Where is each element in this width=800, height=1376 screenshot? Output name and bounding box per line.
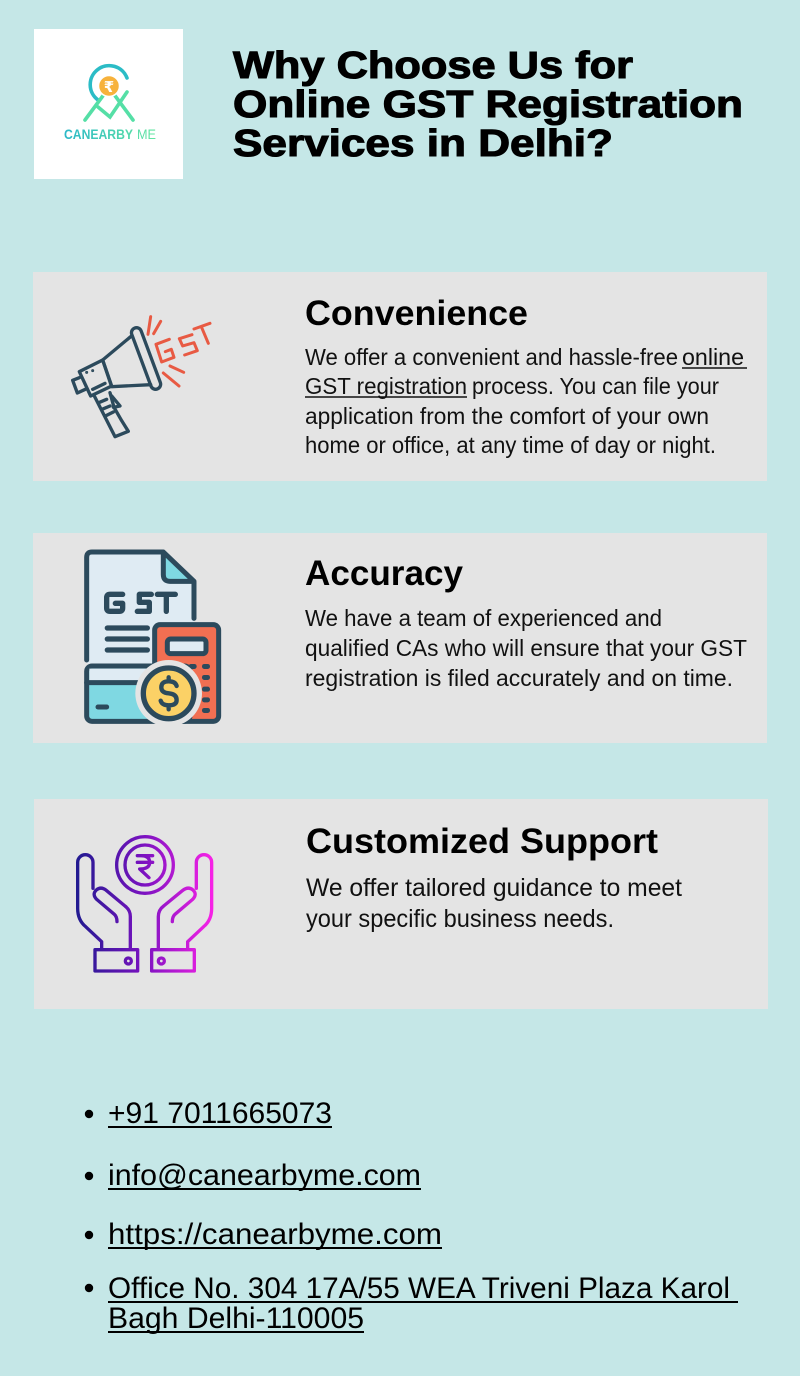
address: Bagh Delhi-110005 [108, 1302, 364, 1335]
body text: We offer tailored guidance to meet [306, 874, 682, 902]
icon: hands holding rupee coin [78, 837, 212, 971]
icon: GST megaphone [73, 317, 210, 437]
body text: GST registration [305, 373, 467, 399]
heading: Convenience [305, 294, 528, 333]
logo card [34, 29, 183, 179]
contact list [85, 1097, 738, 1335]
body text [305, 605, 747, 691]
icon: logo mark [85, 66, 133, 120]
body text: registration is filed accurately and on time. [305, 665, 733, 691]
body text [305, 344, 747, 458]
title: Online GST Registration [233, 84, 743, 126]
heading: Customized Support [306, 822, 658, 861]
logo wordmark: ME [137, 126, 156, 142]
icon: GST document with calculator [87, 552, 219, 727]
panel: customized support [34, 799, 768, 1009]
panel: convenience [33, 272, 767, 481]
address [85, 1272, 738, 1335]
panel: accuracy [33, 533, 767, 743]
address: Office No. 304 17A/55 WEA Triveni Plaza Karol [108, 1272, 730, 1305]
title: Services in Delhi? [233, 123, 613, 165]
body text [306, 874, 682, 933]
icon: logo mark: ₹ [104, 79, 114, 96]
logo wordmark: CANEARBY [64, 126, 134, 142]
body text: home or office, at any time of day or night. [305, 432, 716, 458]
website: https://canearbyme.com [108, 1218, 442, 1251]
body text: qualified CAs who will ensure that your GST [305, 635, 747, 661]
body text: online [682, 344, 744, 370]
body text: We offer a convenient and hassle-free [305, 344, 678, 370]
body text: application from the comfort of your own [305, 403, 709, 429]
heading: Accuracy [305, 554, 464, 593]
body text: your specific business needs. [306, 905, 614, 933]
title [233, 45, 743, 165]
body text: process. You can file your [472, 373, 719, 399]
title: Why Choose Us for [233, 45, 633, 87]
phone: +91 7011665073 [108, 1097, 332, 1130]
body text: We have a team of experienced and [305, 605, 662, 631]
email: info@canearbyme.com [108, 1159, 421, 1192]
